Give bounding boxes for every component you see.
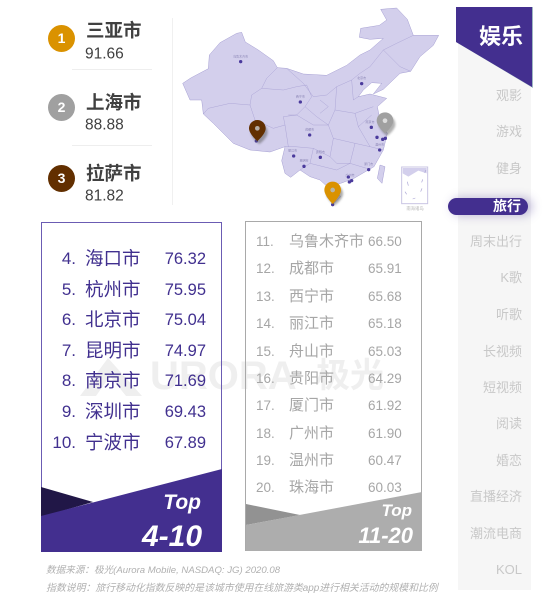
row 10: 10.	[52, 433, 76, 452]
row 19	[256, 452, 402, 469]
source note: 数据来源：极光(Aurora Mobile, NASDAQ: JG) 2020.08	[46, 565, 280, 576]
item 周末出行: 周末出行	[470, 234, 522, 249]
row 18: 广州市	[289, 425, 334, 442]
row 11: 66.50	[368, 234, 402, 249]
row 5: 5.	[62, 280, 76, 299]
row 5: 杭州市	[85, 279, 141, 300]
row 14: 丽江市	[289, 315, 334, 332]
city labels: 南京市	[365, 119, 375, 124]
row 8: 71.69	[165, 372, 206, 390]
row 8	[62, 370, 206, 391]
watermark: 极光	[316, 357, 384, 395]
row 12: 65.91	[368, 261, 402, 276]
row 4: 海口市	[85, 248, 141, 269]
active item 旅行	[448, 198, 528, 215]
row 20: 20.	[256, 480, 275, 495]
city labels: 广州市	[345, 172, 355, 177]
rank 2 score: 88.88	[85, 116, 124, 133]
sidebar heading	[456, 7, 533, 88]
row 14	[256, 315, 402, 332]
watermark: URORA	[150, 354, 297, 398]
ribbon: top 4-10: Top	[163, 491, 201, 514]
row 4: 76.32	[165, 250, 206, 268]
city labels: 厦门市	[364, 161, 373, 166]
top three cities	[48, 20, 152, 204]
row 4: 4.	[62, 249, 76, 268]
list: ranks 11-20	[256, 233, 402, 496]
ribbon: top 11-20	[246, 492, 421, 551]
city labels: 西宁市	[296, 93, 305, 98]
sidebar	[447, 7, 537, 590]
row 12: 12.	[256, 261, 275, 276]
row 15: 15.	[256, 344, 275, 359]
row 19: 60.47	[368, 453, 402, 468]
rank 3 score: 81.82	[85, 187, 124, 204]
index description: 指数说明：旅行移动化指数反映的是该城市使用在线旅游类app进行相关活动的规模和比例	[46, 583, 438, 594]
row 9	[62, 401, 206, 422]
row 20: 60.03	[368, 480, 402, 495]
city labels: 昆明市	[299, 158, 309, 163]
item 长视频: 长视频	[483, 344, 522, 359]
row 15	[256, 343, 402, 360]
ribbon: top 11-20: 11-20	[358, 523, 414, 548]
watermark	[80, 354, 384, 398]
map outline	[183, 8, 439, 204]
ribbon: top 4-10	[41, 469, 222, 553]
row 7: 7.	[62, 341, 76, 360]
panel: top 11-20	[245, 221, 422, 551]
rank 3 badge	[48, 165, 75, 192]
row 17	[256, 397, 402, 414]
item 听歌: 听歌	[496, 307, 522, 322]
sidebar heading: 娱乐	[479, 24, 523, 49]
row 18: 61.90	[368, 426, 402, 441]
item 游戏: 游戏	[496, 124, 522, 139]
row 5	[62, 279, 206, 300]
row 10: 67.89	[165, 434, 206, 452]
row 19: 19.	[256, 453, 275, 468]
row 4	[62, 248, 206, 269]
row 16: 64.29	[368, 371, 402, 386]
row 11	[256, 233, 402, 250]
city labels: 乌鲁木齐市	[233, 53, 248, 58]
row 20: 珠海市	[289, 479, 334, 496]
city labels	[233, 53, 384, 177]
rank 1 badge	[48, 25, 75, 52]
row 9: 深圳市	[85, 401, 141, 422]
ribbon: top 11-20: Top	[381, 501, 412, 520]
ribbon: top 4-10: 4-10	[141, 520, 202, 553]
item 婚恋: 婚恋	[496, 453, 522, 468]
city dots	[239, 60, 387, 206]
pin: Shanghai	[377, 112, 395, 136]
sidebar background	[458, 7, 531, 590]
item K歌: K歌	[500, 270, 522, 285]
city labels: 贵阳市	[316, 149, 325, 154]
row 9: 69.43	[165, 403, 206, 421]
item 观影: 观影	[496, 88, 522, 103]
row 13: 13.	[256, 289, 275, 304]
row 6: 北京市	[85, 309, 141, 330]
item KOL: KOL	[496, 562, 522, 577]
item 健身: 健身	[496, 161, 522, 176]
row 7: 74.97	[165, 342, 206, 360]
row 7	[62, 340, 206, 361]
row 13: 65.68	[368, 289, 402, 304]
city labels: 北京市	[357, 75, 366, 80]
item 直播经济: 直播经济	[470, 489, 522, 504]
province borders	[203, 35, 413, 170]
row 6: 6.	[62, 310, 76, 329]
row 10: 宁波市	[85, 432, 141, 453]
city labels: 成都市	[305, 127, 314, 132]
row 10	[52, 432, 206, 453]
rank 3 badge: 3	[58, 170, 65, 186]
row 17: 17.	[256, 398, 275, 413]
row 15: 舟山市	[289, 343, 334, 360]
South China Sea inset: 南海诸岛	[406, 205, 424, 212]
row 16	[256, 370, 402, 387]
active item 旅行: 旅行	[493, 198, 521, 214]
row 14: 65.18	[368, 316, 402, 331]
row 12: 成都市	[289, 260, 334, 277]
row 8: 8.	[62, 371, 76, 390]
pin: Sanya	[324, 182, 343, 205]
item 阅读: 阅读	[496, 416, 522, 431]
row 6	[62, 309, 206, 330]
row 7: 昆明市	[85, 340, 141, 361]
rank 1 badge: 1	[58, 30, 65, 46]
rank 1 city: 三亚市	[86, 20, 142, 41]
map of China	[182, 8, 439, 212]
row 12	[256, 260, 402, 277]
South China Sea inset	[402, 167, 428, 212]
city labels: 温州市	[375, 142, 384, 147]
city labels: 丽江市	[288, 147, 297, 152]
row 15: 65.03	[368, 344, 402, 359]
row 11: 11.	[256, 234, 274, 249]
list: ranks 4-10	[52, 248, 206, 453]
rank 1 score: 91.66	[85, 45, 124, 62]
rank 3 city: 拉萨市	[86, 163, 142, 184]
row 19: 温州市	[289, 452, 334, 469]
row 18	[256, 425, 402, 442]
row 16: 16.	[256, 371, 275, 386]
pin: Lhasa	[249, 120, 268, 144]
row 14: 14.	[256, 316, 275, 331]
rank 2 city: 上海市	[86, 92, 142, 113]
row 20	[256, 479, 402, 496]
panel: top 4-10	[41, 222, 222, 552]
row 13	[256, 288, 402, 305]
row 17: 厦门市	[289, 397, 334, 414]
row 9: 9.	[62, 402, 76, 421]
row 18: 18.	[256, 426, 275, 441]
rank 2 badge	[48, 94, 75, 121]
row 11: 乌鲁木齐市	[289, 233, 364, 250]
row 6: 75.04	[165, 311, 206, 329]
rank 2 badge: 2	[58, 99, 65, 115]
row 17: 61.92	[368, 398, 402, 413]
row 16: 贵阳市	[289, 370, 334, 387]
item 短视频: 短视频	[483, 380, 522, 395]
row 13: 西宁市	[289, 288, 334, 305]
row 5: 75.95	[165, 281, 206, 299]
row 8: 南京市	[85, 370, 141, 391]
item 潮流电商: 潮流电商	[470, 526, 522, 541]
